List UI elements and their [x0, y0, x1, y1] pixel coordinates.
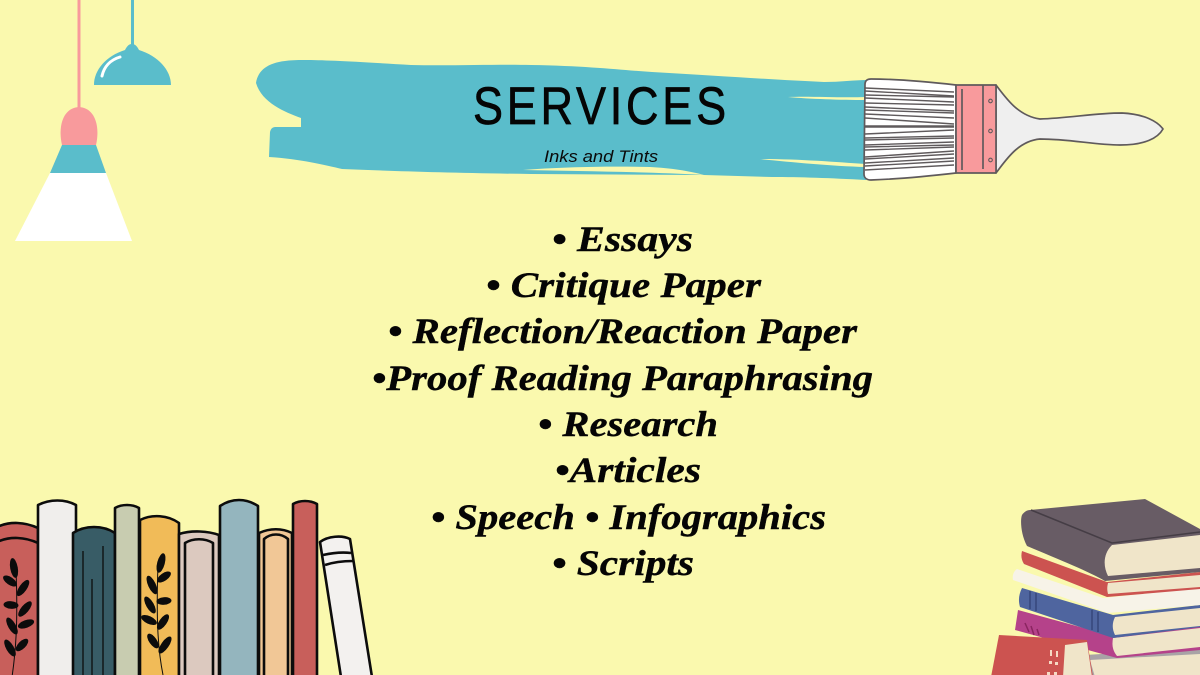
book: red — [1021, 551, 1200, 597]
book: open red — [991, 635, 1093, 675]
paint streaks — [523, 97, 866, 175]
brush handle — [996, 85, 1163, 173]
list item: Essays: • Essays — [552, 219, 693, 259]
list item: Speech and Infographics: • Speech • Infographics — [431, 497, 826, 537]
title: SERVICES — [473, 77, 730, 136]
book: dark teal — [73, 527, 115, 675]
book: blue — [220, 500, 258, 675]
book: white — [38, 500, 76, 675]
services list — [372, 219, 873, 583]
list item: Reflection/Reaction Paper: • Reflection/Reaction Paper — [388, 311, 858, 351]
icon: paint brush — [864, 79, 1163, 180]
ferrule — [956, 85, 996, 173]
icon: large hanging lamp — [15, 0, 132, 241]
illustration: row of upright books — [0, 500, 372, 675]
list item: Research: • Research — [538, 404, 718, 444]
bristles — [864, 79, 956, 180]
book: grey bottom — [1085, 648, 1200, 675]
illustration: stack of books — [991, 499, 1200, 675]
book: yellow with leaves — [140, 516, 179, 675]
book: magenta — [1015, 610, 1200, 658]
book: white — [1013, 569, 1200, 613]
subtitle: Inks and Tints — [544, 147, 659, 166]
paint stroke banner — [256, 60, 866, 180]
book: red narrow — [293, 501, 317, 675]
book: beige — [179, 531, 219, 675]
list item: Scripts: • Scripts — [552, 543, 694, 583]
book: sage — [115, 505, 139, 675]
book: peach — [259, 529, 292, 675]
book: blue — [1019, 588, 1200, 638]
book: leaning white — [320, 537, 372, 675]
icon: small hanging lamp — [94, 0, 171, 85]
book: red with leaves — [0, 523, 38, 675]
list item: Proof Reading Paraphrasing: •Proof Reading Paraphrasing — [372, 358, 873, 398]
book: dark grey top — [1021, 499, 1200, 581]
list item: Critique Paper: • Critique Paper — [486, 265, 762, 305]
list item: Articles: •Articles — [555, 450, 701, 490]
